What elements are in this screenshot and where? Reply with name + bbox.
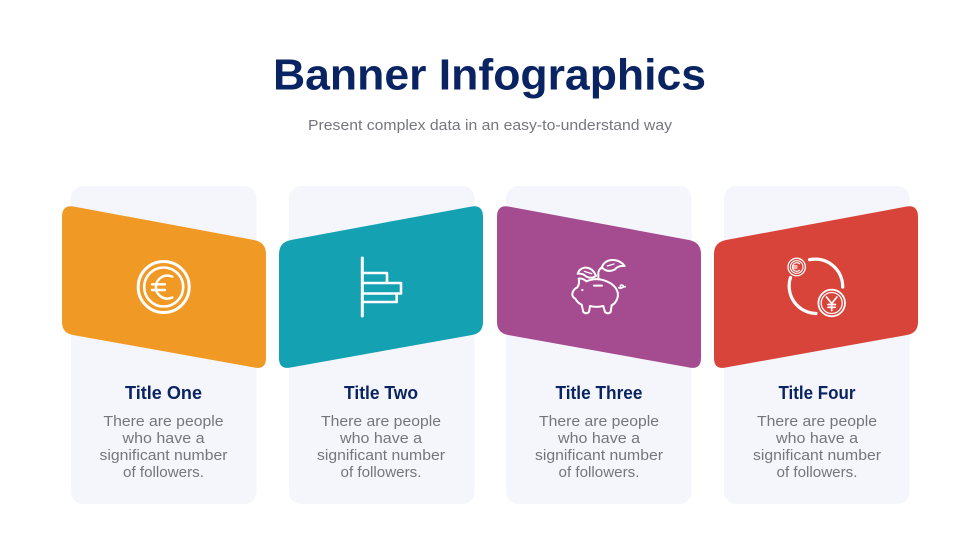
banner: orange: [62, 206, 266, 368]
text: description one: There are people: [104, 413, 224, 430]
text: description three: of followers.: [558, 464, 640, 481]
heading: title three: Title Three: [556, 383, 642, 403]
heading: title one: Title One: [125, 383, 202, 403]
icon: bar chart: [362, 258, 401, 316]
text: description one: who have a: [121, 430, 205, 447]
text: description four: who have a: [775, 430, 859, 447]
banner: purple: [497, 206, 701, 368]
banner: teal: [279, 206, 483, 368]
text: description four: of followers.: [776, 464, 858, 481]
text: description four: There are people: [757, 413, 877, 430]
title: Banner Infographics: [273, 50, 706, 100]
text: description four: [753, 413, 881, 481]
panel: card two: [279, 186, 483, 504]
text: description two: [317, 413, 445, 481]
text: description four: significant number: [753, 447, 881, 464]
card background four: [724, 186, 910, 504]
panel: card four: [714, 186, 918, 504]
text: description three: who have a: [557, 430, 641, 447]
text: description one: [100, 413, 228, 481]
text: description one: of followers.: [123, 464, 204, 481]
panel: card one: [62, 186, 266, 504]
icon: euro coin: [138, 262, 189, 312]
text: description two: of followers.: [340, 464, 422, 481]
icon: piggy bank with sprout: [572, 260, 625, 313]
text: description two: significant number: [317, 447, 445, 464]
icon: currency exchange: [788, 258, 845, 316]
card background three: [506, 186, 692, 504]
heading: title two: Title Two: [344, 383, 418, 403]
heading: title four: Title Four: [778, 383, 856, 403]
text: description one: significant number: [100, 447, 228, 464]
card background two: [289, 186, 474, 504]
text: description two: There are people: [321, 413, 441, 430]
panel: card three: [497, 186, 701, 504]
banner: red: [714, 206, 918, 368]
text: description three: significant number: [535, 447, 663, 464]
card background one: [71, 186, 256, 504]
text: description three: There are people: [539, 413, 659, 430]
text: description three: [535, 413, 663, 481]
text: description two: who have a: [339, 430, 423, 447]
subtitle: Present complex data in an easy-to-understand way: [308, 117, 673, 134]
